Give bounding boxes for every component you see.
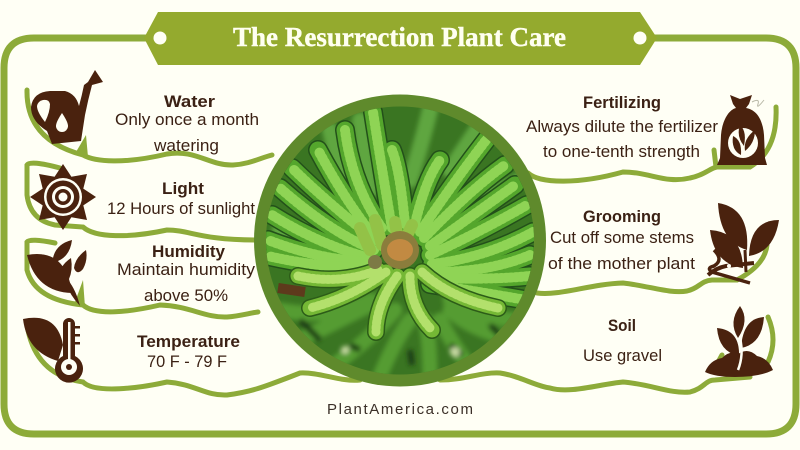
panel: soil — [583, 306, 773, 377]
photo ring — [254, 94, 546, 386]
lower fronds — [298, 270, 498, 332]
icon: leaves and scissors — [708, 203, 779, 283]
wavy dividers and icon leaf outlines, right — [440, 107, 776, 392]
text: light: 12 Hours of sunlight — [107, 199, 255, 218]
panel: temperature — [23, 318, 240, 383]
panel: grooming — [548, 203, 779, 283]
heading: soil: Soil — [608, 316, 636, 335]
text: soil: Use gravel — [583, 346, 662, 365]
heading: fertilizing: Fertilizing — [583, 93, 661, 112]
text: humidity line 2: above 50% — [144, 286, 228, 305]
text: grooming: Cut off some stems — [550, 228, 694, 247]
text: grooming line 2: of the mother plant — [548, 254, 695, 273]
heading: grooming: Grooming — [583, 207, 661, 226]
icon: fertilizer bag — [717, 95, 767, 165]
panel: centre plant photo — [254, 94, 546, 386]
source credit: PlantAmerica.com — [327, 401, 473, 418]
heading: water: Water — [164, 92, 215, 111]
icon: sun — [30, 164, 96, 230]
heading: humidity: Humidity — [152, 242, 226, 261]
icon: plant with droplets — [27, 240, 87, 306]
text: water: Only once a month — [115, 110, 259, 129]
plant rosette — [260, 100, 540, 380]
text: fertilizing line 2: to one-tenth strength — [543, 142, 700, 161]
wavy dividers and icon leaf outlines, left — [27, 90, 360, 395]
heading: light: Light — [162, 179, 204, 198]
panel: water — [31, 70, 259, 155]
title: The Resurrection Plant Care — [233, 22, 566, 52]
icon: watering can — [31, 70, 103, 144]
text: fertilizing: Always dilute the fertilizer — [526, 117, 718, 136]
title banner — [144, 12, 657, 65]
panel: light — [30, 164, 255, 230]
icon: thermometer and leaf — [23, 318, 83, 383]
text: temperature: 70 F - 79 F — [147, 352, 227, 371]
panel: humidity — [27, 240, 256, 306]
upper fronds — [268, 112, 533, 300]
text: humidity: Maintain humidity — [117, 260, 256, 279]
panel: fertilizing — [526, 93, 767, 165]
heading: temperature: Temperature — [137, 332, 240, 351]
text: water line 2: watering — [153, 136, 219, 155]
icon: seedling in soil — [705, 306, 773, 377]
